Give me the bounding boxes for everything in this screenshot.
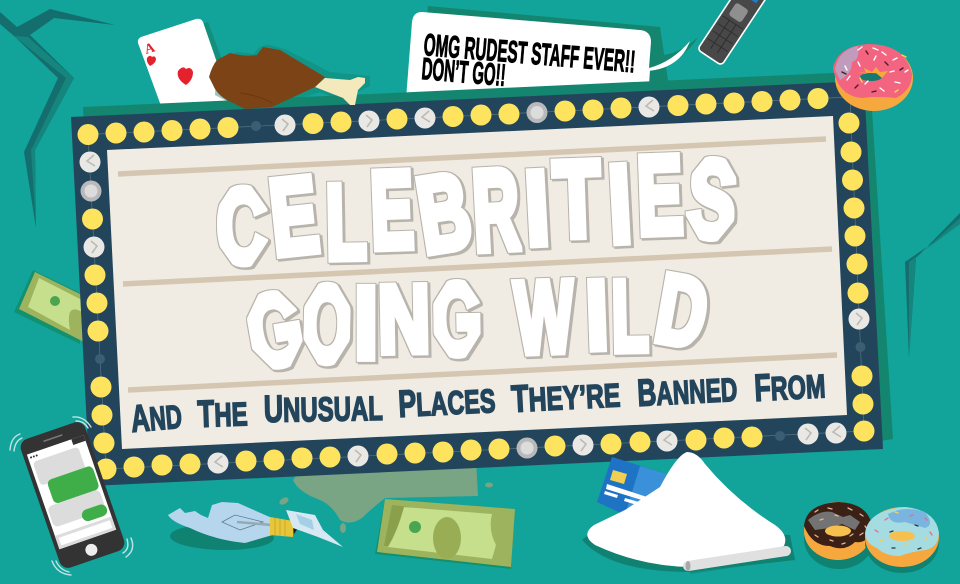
cracks: top left xyxy=(0,9,115,228)
subtitle xyxy=(129,364,826,441)
title: Celebrities: I xyxy=(606,143,634,266)
cracks: right xyxy=(905,213,960,358)
title: Going Wild: W xyxy=(513,259,575,375)
banknote: left xyxy=(14,270,84,344)
title: Going Wild: I xyxy=(584,260,610,370)
bulb wiring xyxy=(88,97,864,469)
phone vibration marks xyxy=(10,417,133,575)
marquee board shadow xyxy=(83,72,893,460)
rolled note xyxy=(686,551,788,571)
spill xyxy=(278,460,493,533)
title: Celebrities: B xyxy=(410,151,478,277)
bulbs: left column xyxy=(80,152,114,454)
title: Going Wild: I xyxy=(354,266,378,380)
speech bubble xyxy=(405,6,698,112)
title: Going Wild: L xyxy=(611,259,649,373)
title: Celebrities: I xyxy=(522,150,552,268)
subtitle: UNUSUAL xyxy=(263,387,383,431)
subtitle: THEY’RE xyxy=(510,373,621,421)
title: Going Wild: N xyxy=(377,264,431,373)
chocolate donut xyxy=(804,502,874,569)
title: Going Wild: G xyxy=(431,263,483,377)
subtitle: BANNED xyxy=(636,368,738,415)
title: Celebrities: E xyxy=(635,132,685,258)
banknote: bottom xyxy=(375,499,515,569)
subtitle: AND xyxy=(129,395,184,441)
glazed pink donut xyxy=(833,44,913,111)
bubble text: DON’T GO!! xyxy=(420,51,507,93)
speech bubble: OMG RUDEST STAFF EVER!! xyxy=(422,27,637,79)
tan rule lines xyxy=(118,139,837,390)
chicken drumstick xyxy=(209,45,370,109)
old mobile phone xyxy=(697,0,771,66)
board inner panel xyxy=(107,116,847,449)
title: Celebrities: T xyxy=(552,137,602,260)
bulbs: top row xyxy=(78,88,828,145)
subtitle: THE xyxy=(197,392,248,436)
title: Celebrities: L xyxy=(325,162,367,282)
broken light bulb xyxy=(168,502,343,551)
smartphone xyxy=(18,420,127,570)
title: Celebrities: S xyxy=(683,136,741,262)
playing card: ace of hearts: A xyxy=(143,40,158,58)
bulbs: bottom row xyxy=(96,422,846,480)
blue donut xyxy=(865,507,939,573)
title: Going Wild: D xyxy=(648,253,716,369)
credit card xyxy=(597,457,667,515)
bubble text xyxy=(420,27,637,93)
title: Celebrities: R xyxy=(470,145,522,275)
title: Celebrities: E xyxy=(369,149,416,273)
title: Going Wild: G xyxy=(238,269,312,391)
title: Celebrities: E xyxy=(265,155,324,279)
title: Celebrities xyxy=(216,151,740,270)
subtitle: PLACES xyxy=(397,379,496,426)
title: Going Wild: O xyxy=(301,263,353,385)
bulbs: right column xyxy=(838,112,874,442)
white powder pile xyxy=(582,452,795,572)
playing card: ace of hearts xyxy=(138,19,240,114)
title: Going Wild xyxy=(246,269,710,372)
marquee board xyxy=(71,81,883,486)
subtitle: FROM xyxy=(753,364,826,410)
title: Celebrities: C xyxy=(216,168,268,286)
